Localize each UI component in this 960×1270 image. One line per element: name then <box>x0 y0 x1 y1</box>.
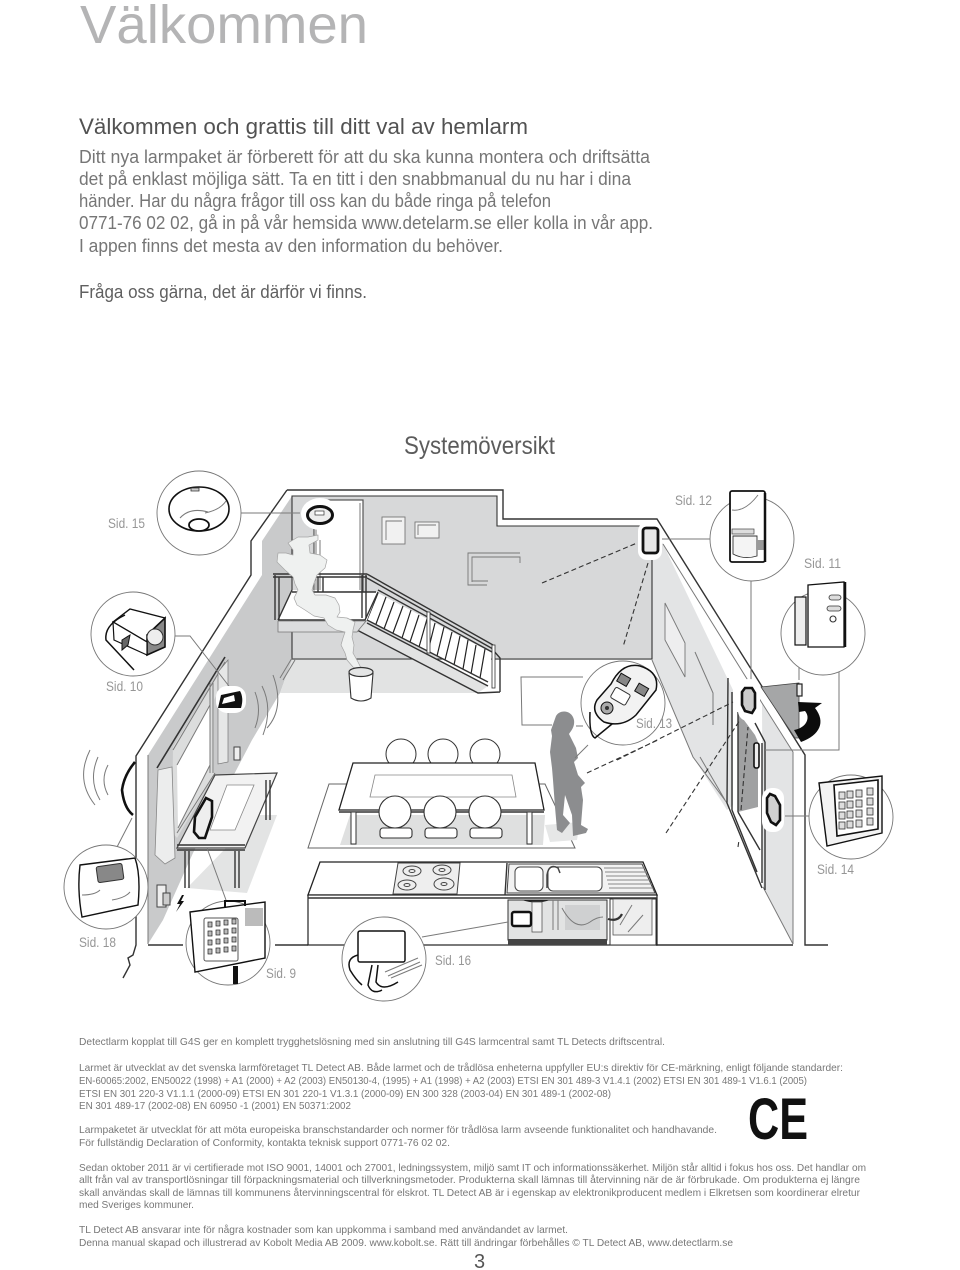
callout label overlapping remote: Sid. 13 <box>636 716 672 731</box>
legal text block: EN-60065:2002, EN50022 (1998) + A1 (2000) + A2 (2003) EN50130-4, (1995) + A1 (1998) + A2 (2003) ETSI EN 301 489-3 V1.4.1 (2002) ETSI EN 301 489-1 V1.6.1 (2005) <box>79 1075 807 1087</box>
wall panel right <box>665 603 685 677</box>
CE mark: CE <box>748 1087 808 1152</box>
table shadow <box>340 815 545 845</box>
wall-mounted icon left <box>122 762 135 815</box>
open door panel <box>761 683 799 738</box>
pictures on back wall <box>382 517 520 585</box>
disclaimer text block: TL Detect AB ansvarar inte för några kostnader som kan uppkomma i samband med användandet av larmet. <box>79 1224 568 1236</box>
kitchen counter <box>308 862 657 945</box>
welcome text block: händer. Har du några frågor till oss kan du både ringa på telefon <box>79 191 551 211</box>
welcome text block: Fråga oss gärna, det är därför vi finns. <box>79 282 367 302</box>
welcome text block: Ditt nya larmpaket är förberett för att du ska kunna montera och driftsätta <box>79 147 651 167</box>
environment text block: skall användas skall de lämnas till kommunens återvinningscentral för elskrot. TL Detect AB är i egenskap av elektronikproducent medlem i Elkretsen som koordinerar elretur <box>79 1187 860 1199</box>
welcome text block <box>79 147 653 302</box>
device: keypad small <box>762 788 784 832</box>
callout: door contact <box>781 582 865 675</box>
page reference labels <box>79 493 854 981</box>
environment text block <box>79 1162 866 1211</box>
callout: keypad <box>809 775 893 859</box>
person shadow <box>545 822 580 842</box>
back wall <box>292 496 652 660</box>
legal text block: Larmpaketet är utvecklat för att möta europeiska branschstandarder och normer för trådlösa larm avseende funktionalitet och handhavande. <box>79 1124 717 1136</box>
page reference labels: Sid. 10 <box>106 679 143 694</box>
welcome text block: I appen finns det mesta av den information du behöver. <box>79 236 503 256</box>
left wall <box>148 496 292 944</box>
smoke plume <box>277 535 363 673</box>
window and curtain <box>155 657 228 864</box>
person silhouette <box>550 711 588 836</box>
sink <box>507 864 655 893</box>
disclaimer text block <box>79 1224 733 1249</box>
right wall <box>652 526 733 810</box>
environment text block: Sedan oktober 2011 är vi certifierade mot ISO 9001, 14001 och 27001, ledningssystem, miljö samt IT och informationssäkerhet. Miljön står alltid i fokus hos oss. Det handlar om <box>79 1162 866 1174</box>
device: door contact small <box>738 679 760 721</box>
welcome text block: det på enklast möjliga sätt. Ta en titt i den snabbmanual du nu har i dina <box>79 169 632 189</box>
page reference labels: Sid. 12 <box>675 493 712 508</box>
environment text block: allt från val av transportlösningar till förpackningsmaterial och tillverkningsmetoder. Produkterna skall lämnas till återvinning när de är förbrukade. Om produkterna ej längre <box>79 1174 860 1186</box>
rotation arrow <box>794 702 822 742</box>
house illustration <box>84 490 839 978</box>
device: siren small <box>216 686 246 713</box>
page reference labels: Sid. 14 <box>817 862 854 877</box>
device: contact at door top <box>797 684 802 696</box>
legal text block: För fullständig Declaration of Conformity, kontakta teknisk support 0771-76 02 02. <box>79 1137 450 1149</box>
page reference labels: Sid. 15 <box>108 516 145 531</box>
dishwasher cabinet <box>608 899 656 945</box>
connector lines <box>117 513 839 937</box>
right wall section beyond door <box>762 703 793 944</box>
floor band <box>280 660 478 693</box>
device: motion sensor small <box>638 522 662 560</box>
front chairs <box>379 796 502 838</box>
page reference labels: Sid. 9 <box>266 966 296 981</box>
environment text block: med Sveriges kommuner. <box>79 1199 194 1211</box>
callout: siren <box>91 592 175 676</box>
page reference labels: Sid. 11 <box>804 556 841 571</box>
wall socket <box>157 747 240 907</box>
stair <box>273 574 500 693</box>
sensor waves <box>255 675 278 735</box>
page reference labels: Sid. 16 <box>435 953 471 968</box>
device: smoke detector small <box>301 498 339 530</box>
door on back wall <box>314 500 363 592</box>
outer wall outline <box>123 490 828 978</box>
back chairs <box>386 739 500 769</box>
desk <box>177 773 277 888</box>
callout: motion sensor <box>710 491 794 581</box>
disclaimer text block: Denna manual skapad och illustrerad av Kobolt Media AB 2009. www.kobolt.se. Rätt till ändringar förbehålles © TL Detect AB, www.detectlarm.se <box>79 1237 733 1249</box>
legal text block: EN 301 489-17 (2002-08) EN 60950 -1 (2001) EN 50371:2002 <box>79 1100 351 1112</box>
dashed detection lines <box>542 543 748 847</box>
device: door contact on door <box>754 743 759 768</box>
doorway right wall <box>727 678 765 890</box>
dining table <box>339 763 544 844</box>
legal text block <box>79 1036 843 1149</box>
callout: smoke detector <box>157 471 241 555</box>
callout: G4S module <box>64 845 148 929</box>
device: control panel small <box>194 798 212 838</box>
callout: remote control <box>581 661 665 745</box>
legal text block: Larmet är utvecklat av det svenska larmföretaget TL Detect AB. Både larmet och de trådlösa enheterna uppfyller EU:s direktiv för CE-märkning, enligt följande standarder: <box>79 1062 843 1074</box>
legal text block: Detectlarm kopplat till G4S ger en komplett trygghetslösning med sin anslutning till G4S larmcentral samt TL Detects driftscentral. <box>79 1036 665 1048</box>
waste bin <box>349 668 373 701</box>
page reference labels: Sid. 18 <box>79 935 116 950</box>
base lines <box>148 944 793 946</box>
callout: control panel <box>186 901 270 985</box>
welcome heading: Välkommen och grattis till ditt val av hemlarm <box>79 114 528 139</box>
rug <box>308 784 575 848</box>
callout: GSM router <box>342 917 426 1001</box>
stove <box>393 863 460 894</box>
under sink cabinet <box>508 900 607 945</box>
legal text block: ETSI EN 301 220-3 V1.1.1 (2000-09) ETSI EN 301 220-1 V1.3.1 (2000-09) EN 300 328 (2003-04) EN 301 489-1 (2002-08) <box>79 1088 611 1100</box>
desk shadow <box>187 815 277 893</box>
remote frame lines <box>521 677 588 758</box>
section heading: system overview: Systemöversikt <box>404 432 555 460</box>
welcome text block: 0771-76 02 02, gå in på vår hemsida www.detelarm.se eller kolla in vår app. <box>79 213 653 233</box>
lightning <box>176 895 184 912</box>
